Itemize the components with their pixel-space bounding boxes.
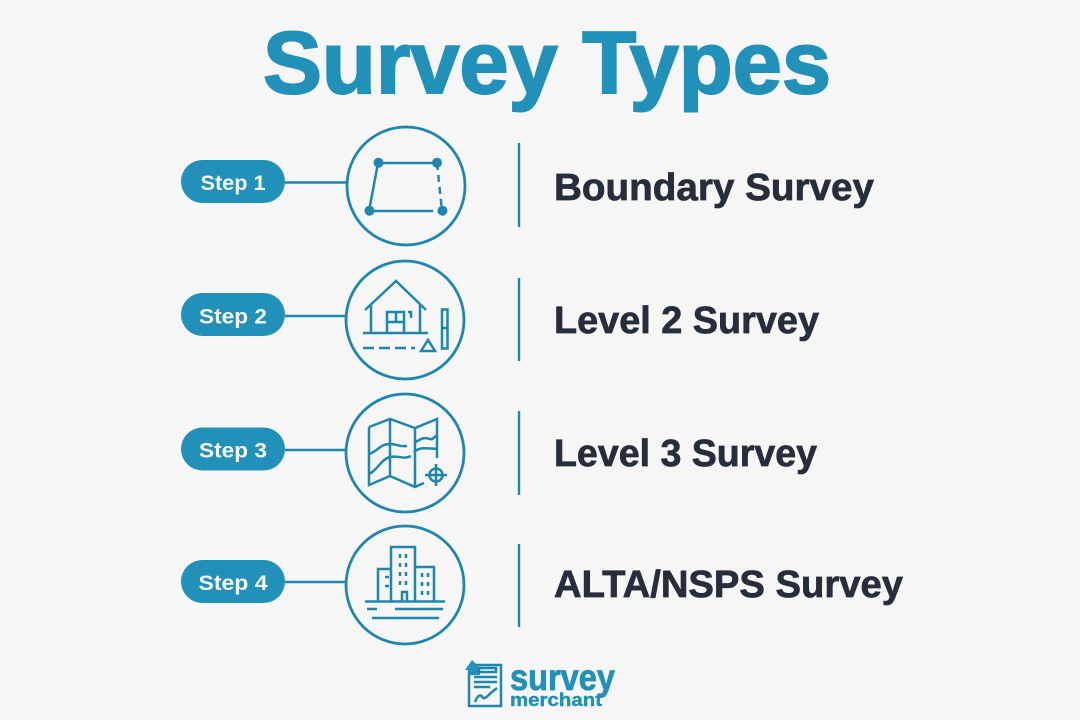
connector 4: [285, 581, 346, 583]
divider 1: [518, 143, 520, 227]
row 1: boundary survey: [181, 127, 874, 245]
icon: boundary plot: [347, 127, 465, 245]
divider 3: [518, 411, 520, 495]
label 1: Boundary Survey: [554, 167, 874, 209]
connector 3: [285, 449, 346, 451]
step 4 pill: [181, 560, 285, 603]
logo: survey merchant: merchant: [510, 690, 602, 710]
icon: document with house: [465, 660, 501, 706]
wordmark: survey: [510, 657, 615, 698]
title: Survey Types: [263, 13, 831, 112]
step 2 pill: [181, 293, 285, 336]
step 2 pill: Step 2: [199, 306, 267, 328]
step 1 pill: Step 1: [200, 172, 266, 195]
step 4 pill: Step 4: [198, 572, 268, 595]
connector 2: [285, 315, 346, 317]
label 4: ALTA/NSPS Survey: [554, 564, 903, 606]
row 2: level 2 survey: [181, 261, 819, 379]
step 3 pill: [181, 428, 285, 470]
step 1 pill: [181, 160, 285, 203]
divider 2: [518, 278, 520, 361]
label 2: Level 2 Survey: [554, 300, 819, 342]
connector 1: [285, 181, 347, 184]
row 3: level 3 survey: [181, 394, 817, 512]
label 3: Level 3 Survey: [554, 433, 817, 475]
row 4: alta/nsps survey: [181, 526, 903, 644]
logo: survey merchant: [465, 657, 615, 710]
icon: map and target: [346, 394, 464, 512]
icon: buildings: [346, 526, 464, 644]
icon: house and level: [346, 261, 464, 379]
divider 4: [518, 544, 520, 627]
step 3 pill: Step 3: [199, 440, 267, 462]
